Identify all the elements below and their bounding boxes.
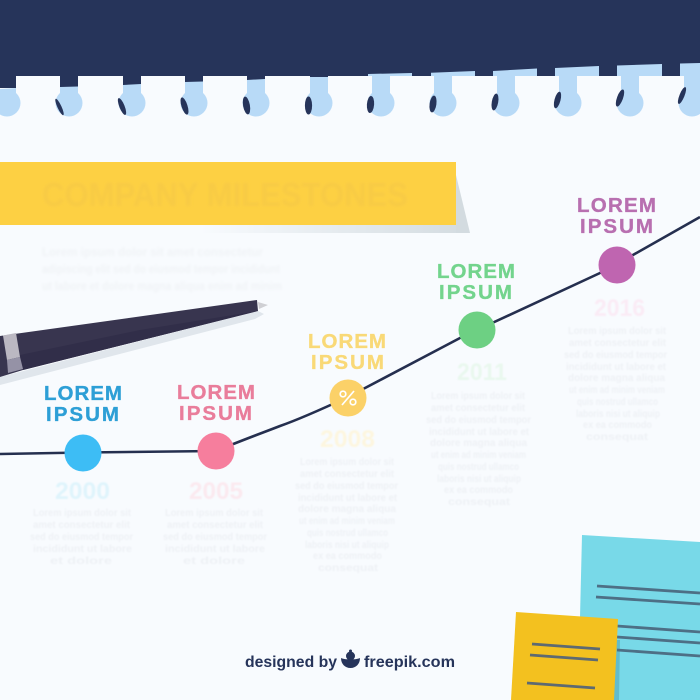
yellow sticky note [511,612,618,700]
milestone 3: IPSUM [311,351,384,374]
intro text block: ut labore et dolore magna aliqua enim ad minim [42,279,282,293]
milestone 5: dolore magna aliqua [568,372,665,384]
milestone 4 [426,260,531,508]
milestone 1: IPSUM [46,403,119,426]
milestone 4: ex ea commodo [444,484,513,496]
milestone 5: ut enim ad minim veniam [569,384,665,396]
milestone 2: amet consectetur elit [167,519,263,531]
milestone 4: incididunt ut labore et [429,426,529,438]
milestone 5: LOREM [577,194,656,217]
icon: percent [340,391,356,405]
milestone 1: 2000 [55,478,110,505]
milestone 4: LOREM [437,260,515,283]
milestone 2: incididunt ut labore [165,543,265,555]
milestone 1: incididunt ut labore [33,543,132,555]
milestone 5 [564,194,667,443]
milestone 4: ut enim ad minim veniam [431,449,526,461]
milestone 2: Lorem ipsum dolor sit [165,507,263,519]
milestone 5: quis nostrud ullamco [577,396,658,408]
milestone 3: incididunt ut labore et [298,492,397,504]
milestone 5: 2016 [594,295,645,322]
milestone 4: sed do eiusmod tempor [426,414,531,426]
intro text block: Lorem ipsum dolor sit amet consectetur [42,245,263,259]
milestone 5: laboris nisi ut aliquip [576,408,660,420]
freepik credit [245,650,455,671]
milestone 2: IPSUM [179,402,252,425]
milestone 5: consequat [586,431,649,443]
timeline line [0,217,700,454]
title banner: COMPANY MILESTONES [42,176,408,213]
milestone 5: Lorem ipsum dolor sit [568,325,666,337]
milestone 1: Lorem ipsum dolor sit [33,507,131,519]
dark header band [0,0,700,76]
milestone 1 [30,382,133,567]
milestone 3: sed do eiusmod tempor [295,480,398,492]
milestone 3: laboris nisi ut aliquip [305,539,389,551]
milestone 5: IPSUM [580,215,653,238]
milestone 4: Lorem ipsum dolor sit [431,390,525,402]
milestone 2 [163,381,267,567]
milestone 1: et dolore [50,555,112,567]
milestone 4: laboris nisi ut aliquip [437,473,521,485]
milestone 3: Lorem ipsum dolor sit [300,456,394,468]
notebook binding rings [0,63,700,116]
milestone 4: amet consectetur elit [431,402,525,414]
milestone 2: et dolore [183,555,245,567]
milestone 5: amet consectetur elit [569,337,666,349]
intro text block: adipiscing elit sed do eiusmod tempor incididunt [42,262,280,276]
milestone 3: LOREM [308,330,386,353]
milestone 2: LOREM [177,381,255,404]
milestone 5: ex ea commodo [583,419,652,431]
milestone 1: amet consectetur elit [33,519,130,531]
milestone 5: sed do eiusmod tempor [564,349,667,361]
milestone 3: ut enim ad minim veniam [299,515,395,527]
title banner [0,162,470,233]
milestone 2: 2005 [189,478,243,505]
milestone 4: IPSUM [439,281,512,304]
milestone 4: consequat [448,496,511,508]
freepik credit: freepik.com [364,654,455,671]
milestone 5: incididunt ut labore et [566,361,666,373]
milestone 3: dolore magna aliqua [298,503,396,515]
intro text block [42,245,282,293]
milestone 3: amet consectetur elit [300,468,394,480]
milestone 3: 2008 [320,426,375,453]
milestone 1: sed do eiusmod tempor [30,531,133,543]
blue sticky note [578,535,700,700]
icon: freepik logo [341,650,360,668]
milestone 3: quis nostrud ullamco [307,527,388,539]
milestone 3: ex ea commodo [313,550,382,562]
freepik credit: designed by [245,654,337,671]
milestone 1: LOREM [44,382,122,405]
milestone 4: 2011 [457,359,507,386]
milestone 4: dolore magna aliqua [430,437,527,449]
milestone 4: quis nostrud ullamco [438,461,519,473]
milestone 3: consequat [318,562,379,574]
milestone 2: sed do eiusmod tempor [163,531,267,543]
milestone 3 [295,330,398,574]
pen illustration [0,300,268,385]
